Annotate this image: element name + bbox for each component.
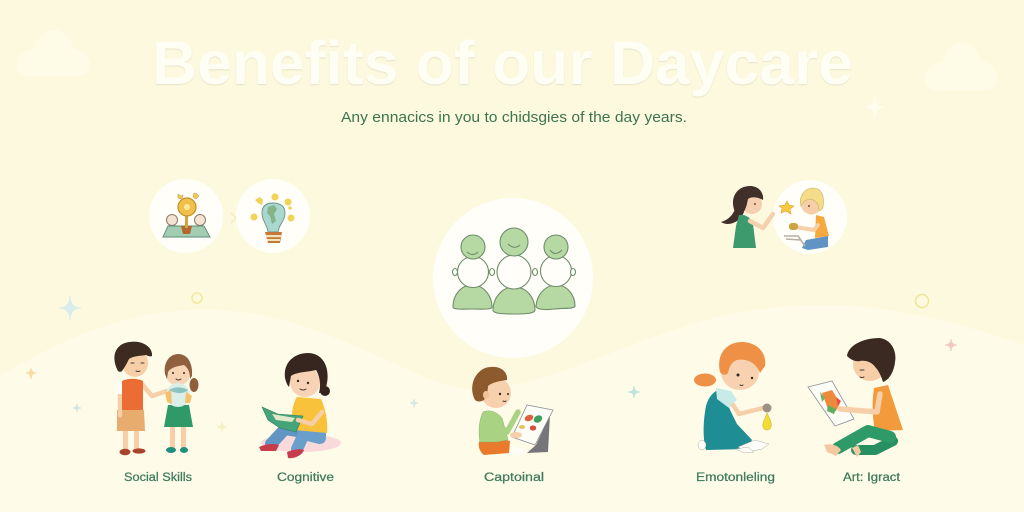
illustration: blond child [784, 188, 829, 250]
label: emotonleling: Emotonleling [696, 472, 775, 484]
subtitle: Any ennacics in you to chidsgies of the day years. [341, 109, 687, 126]
label: art impact: Art: Igract [843, 472, 901, 484]
label: captoinal: Captoinal [484, 472, 544, 484]
icon: yellow star spark [779, 201, 794, 214]
illustration: orange-haired girl [694, 342, 772, 453]
label: cognitive: Cognitive [277, 472, 334, 484]
panel: idea circle left [149, 179, 223, 253]
illustration: boy with picture board [472, 367, 553, 455]
illustration: girl with dark hair [721, 186, 773, 248]
panel: light bulb circle [236, 179, 310, 253]
illustration: girl reading a book [259, 353, 341, 458]
cloud left [17, 30, 90, 76]
cloud right [925, 43, 997, 90]
boy [114, 342, 167, 455]
icon: globe light bulb [250, 194, 294, 243]
icon: table with two people and idea plant [163, 193, 210, 237]
girl [164, 354, 198, 453]
icon: three green figures [452, 228, 576, 314]
arrow: chevron between circles [231, 213, 236, 223]
background wave [0, 305, 1024, 512]
illustration: boy with painting [808, 338, 903, 457]
illustration: social skills children [114, 342, 198, 455]
title: Benefits of our Daycare [152, 29, 853, 97]
panel: central group circle [433, 198, 593, 358]
panel: craft circle right [721, 180, 847, 254]
decorative stars and rings [26, 96, 957, 432]
label: social skills: Social Skills [124, 472, 192, 484]
